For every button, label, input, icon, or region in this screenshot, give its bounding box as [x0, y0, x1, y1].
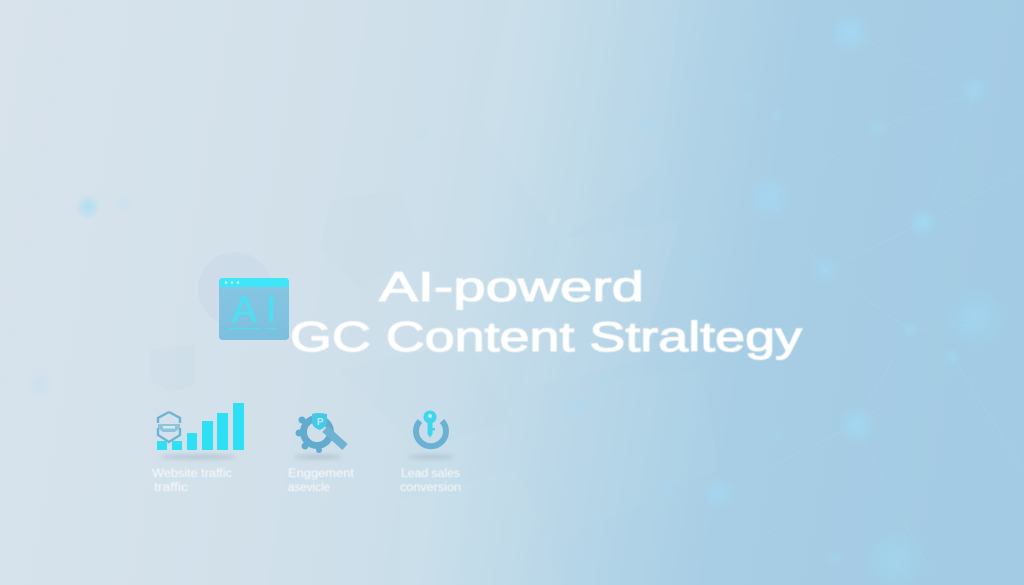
- label: lead sales conversion: Lead sales: [401, 468, 460, 480]
- label: engagement: [288, 468, 355, 494]
- label: website traffic: traffic: [154, 482, 188, 494]
- icon: engagement gear and magnifier: [294, 413, 345, 460]
- icon: lead sales key ring: [408, 410, 454, 460]
- label: engagement: Enggement: [288, 468, 355, 480]
- icon: AI browser window: I: [266, 289, 276, 330]
- title: [290, 263, 802, 360]
- label: lead sales conversion: [400, 468, 461, 494]
- icon: AI browser window: [198, 252, 289, 340]
- icon: website traffic bar chart: [157, 403, 244, 460]
- title: GC Content Straltegy: [290, 313, 802, 360]
- background network lines: [718, 33, 1024, 570]
- label: website traffic: Website traffic: [152, 468, 232, 480]
- label: website traffic: [152, 468, 232, 494]
- title: AI-powerd: [379, 263, 644, 310]
- icon: AI browser window: A: [232, 289, 257, 330]
- icon: engagement gear and magnifier: P: [317, 417, 324, 428]
- label: lead sales conversion: conversion: [400, 482, 461, 494]
- label: engagement: asevicle: [288, 482, 330, 494]
- background polygon facets: [150, 0, 720, 585]
